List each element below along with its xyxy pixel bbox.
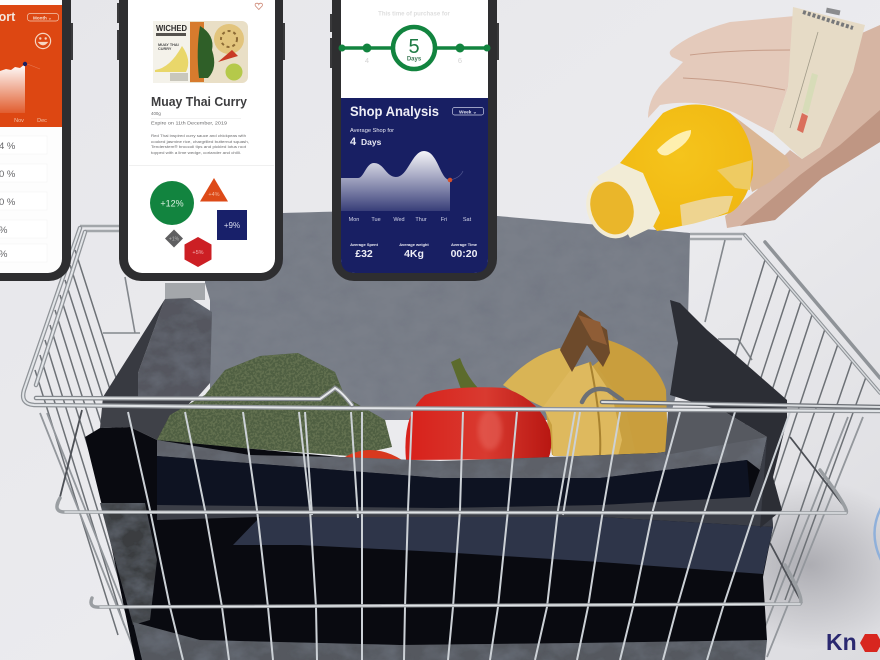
product image: meal pack: CURRY [158, 47, 172, 51]
product image: meal pack: MUAY THAI [158, 43, 179, 47]
basket rear and side wires [35, 226, 866, 660]
stat: grey diamond: +1% [169, 236, 180, 242]
stat: average spent: Average Spent [350, 242, 379, 247]
purchase timeline: This time of purchase for [378, 12, 450, 18]
stat: orange triangle [200, 178, 228, 202]
weekday labels: Sat [463, 217, 472, 223]
average shop text: Days [361, 137, 382, 147]
tomato [340, 450, 402, 460]
panel heading: Shop Analysis [350, 104, 439, 119]
company logo [826, 629, 880, 655]
week selector [452, 108, 484, 115]
phone: shop analysis screen [330, 0, 499, 281]
month selector: Month ⌄ [33, 15, 52, 20]
report header [0, 5, 62, 127]
product details: cooked jasmine rice, chargrilled butternut squash, [151, 139, 249, 144]
stat: average time: 00:20 [451, 248, 478, 260]
stat: green circle [150, 181, 194, 225]
phone 2 body [119, 0, 283, 281]
percentage rows [0, 136, 47, 262]
average shop text: 4 [350, 136, 357, 148]
bag: right flap [665, 300, 787, 528]
bananas [503, 310, 668, 456]
product details [151, 111, 249, 155]
weekday labels [349, 217, 472, 223]
purchase timeline: 5 [408, 36, 420, 58]
bag: left flap [100, 298, 212, 440]
arm and lower palm [725, 25, 880, 228]
red pepper [405, 358, 551, 460]
month labels: Nov [14, 118, 24, 124]
product details: topped with a lime wedge, coriander and chilli. [151, 150, 241, 155]
phone: product screen [117, 0, 285, 281]
stat: average weight [399, 242, 429, 260]
product image: meal pack [153, 21, 248, 83]
stat: orange triangle: +4% [208, 192, 220, 198]
week selector: Week ⌄ [459, 109, 477, 115]
bag: front panel [85, 427, 773, 660]
stat: navy square [217, 210, 247, 240]
weekday labels: Mon [349, 217, 359, 223]
purchase timeline: 6 [458, 56, 462, 65]
stat: average spent [350, 242, 379, 260]
stat: red hexagon: +5% [192, 250, 204, 256]
month selector [28, 14, 58, 21]
report chart [0, 62, 40, 113]
stat: average weight: Average weight [399, 242, 429, 247]
average shop text: Average Shop for [350, 128, 394, 134]
product image: meal pack: WICHED [156, 23, 187, 33]
hand holding juice bottle [578, 7, 880, 246]
month labels [14, 118, 47, 124]
area chart [341, 151, 463, 211]
purchase timeline [338, 12, 490, 69]
bag: rear grey panel [165, 211, 690, 420]
stat: grey diamond [165, 230, 183, 248]
stat: green circle: +12% [160, 198, 184, 208]
stat: average time: Average Time [451, 242, 478, 247]
weekday labels: Tue [371, 217, 381, 223]
month labels: Dec [37, 118, 47, 124]
phone: report screen [0, 0, 73, 281]
smiley icon [35, 33, 51, 49]
stat: navy square: +9% [224, 221, 240, 230]
company logo: Kn [826, 629, 857, 655]
icon: heart [255, 3, 262, 10]
weekday labels: Thur [415, 217, 427, 223]
weekday labels: Fri [441, 217, 447, 223]
product title: Muay Thai Curry [151, 94, 248, 109]
analysis panel [341, 98, 488, 273]
logo mark: blue arc [874, 508, 880, 560]
purchase timeline: Days [407, 56, 422, 62]
product details: Red Thai inspired curry sauce and chickpeas with [151, 133, 246, 138]
phone 1 body [0, 0, 71, 281]
stat: average time [451, 242, 478, 260]
product details: Expire on 11th December, 2019 [151, 120, 228, 126]
basket rails [23, 228, 880, 607]
stat: red hexagon [184, 237, 212, 267]
product details: Tenderstem® broccoli tips and pickled lotus root [151, 144, 247, 149]
phone 3 body [332, 0, 497, 281]
wearable wrist band [773, 7, 865, 159]
basket front wires [128, 412, 790, 660]
juice bottle [578, 104, 790, 246]
stat: average weight: 4Kg [404, 248, 424, 260]
purchase timeline: 4 [365, 56, 369, 65]
product details: 400g [151, 111, 161, 116]
basket shadow [700, 480, 880, 650]
weekday labels: Wed [393, 217, 405, 223]
stat: average spent: £32 [355, 248, 373, 260]
average shop text [350, 128, 394, 148]
fingers and back of hand [648, 16, 795, 133]
broccoli [157, 353, 392, 456]
